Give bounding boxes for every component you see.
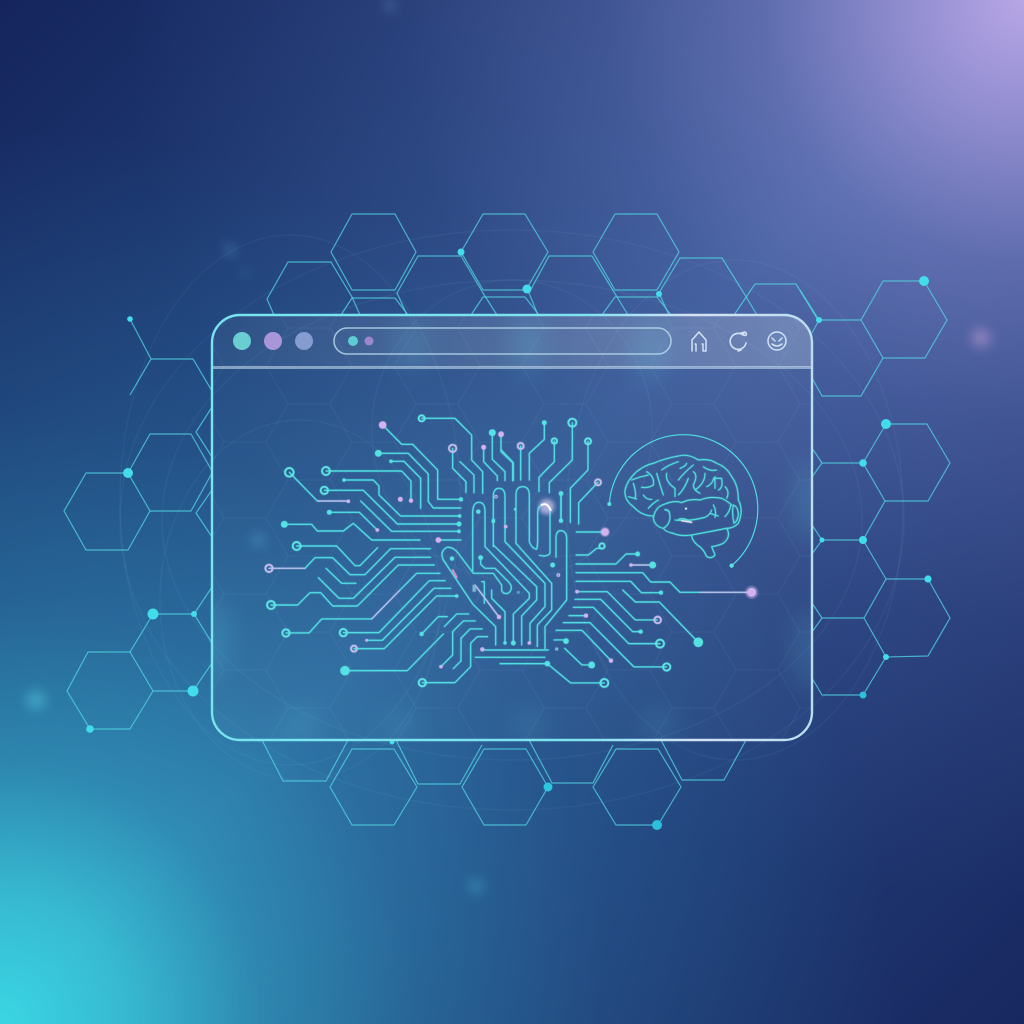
hexagon network: bottom: [262, 740, 746, 830]
panel: browser window: [196, 315, 822, 740]
index finger: [473, 502, 529, 643]
header divider: [213, 366, 811, 369]
hexagon network: left: [64, 316, 212, 733]
palm and wrist details: [559, 493, 563, 521]
ring and little fingers: [516, 487, 550, 556]
window control dots: [233, 332, 313, 350]
circuit traces: left side: [265, 415, 513, 686]
address bar: [334, 328, 671, 354]
icon: refresh: [730, 332, 746, 351]
circuit traces: right side: [499, 419, 758, 687]
hexagon network: top: [267, 214, 818, 320]
panel outline: [212, 315, 812, 740]
faint concentric rings: [120, 230, 904, 810]
circuit hand: [442, 487, 568, 657]
icon: smiley: [768, 332, 786, 350]
brain ring arc: [607, 435, 758, 567]
thumb outline: [442, 547, 511, 645]
middle finger: [493, 488, 545, 643]
icon: home: [692, 332, 706, 351]
hexagon network: right: [800, 276, 950, 698]
icon: brain: [625, 455, 741, 558]
